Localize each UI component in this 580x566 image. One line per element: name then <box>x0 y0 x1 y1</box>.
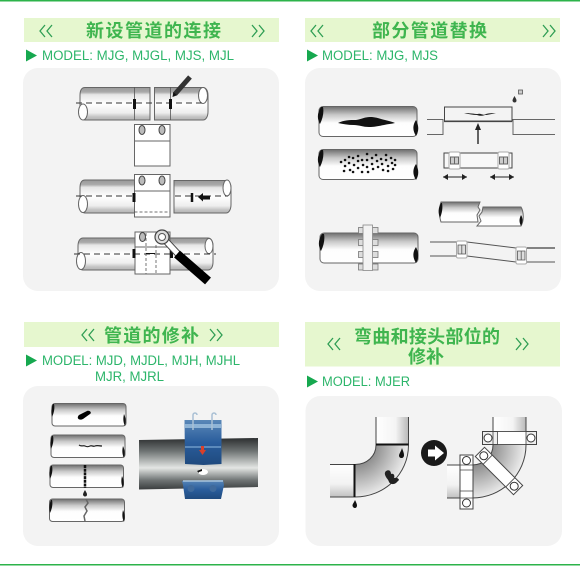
clamp: diagonal <box>475 447 523 495</box>
panel: elbow and joint repair <box>306 396 562 546</box>
diagram: broken pipe <box>439 202 523 226</box>
diagram: two-clamp sleeve with arrows <box>443 152 514 180</box>
diagram: circumferential leak <box>49 465 124 496</box>
bottom border line <box>0 564 580 566</box>
section heading: new pipe connection: 新设管道的连接 <box>86 20 221 41</box>
clamp: left <box>460 455 473 509</box>
diagram: elbow with clamps fitted <box>447 417 536 509</box>
diagram: clamp <box>134 124 170 166</box>
diagram: long crack pipe <box>318 106 418 136</box>
clamp: top <box>482 432 536 444</box>
diagram: flanged pipe <box>319 225 418 270</box>
top border line <box>0 0 580 2</box>
section heading: elbow and joint repair: 弯曲和接头部位的 <box>354 326 500 347</box>
model list: pipe repair: MODEL: MJD, MJDL, MJH, MJHL <box>42 353 240 368</box>
section heading: partial pipe replacement: 部分管道替换 <box>372 20 487 41</box>
diagram: insert pipe into clamp <box>76 174 231 217</box>
diagram: hole in pipe <box>51 404 126 426</box>
diagram: pitted pipe <box>318 150 418 180</box>
section heading: pipe repair <box>24 322 279 347</box>
model list: new pipe connection: MODEL: MJG, MJGL, MJS, MJL <box>42 48 234 63</box>
model list: elbow and joint repair: MODEL: MJER <box>322 374 410 389</box>
section heading: elbow and joint repair <box>305 322 560 367</box>
section heading: elbow and joint repair: 修补 <box>408 347 444 367</box>
diagram: leaking elbow <box>330 417 408 508</box>
panel: pipe repair <box>23 386 279 546</box>
section heading: partial pipe replacement <box>305 18 560 42</box>
panel: partial pipe replacement <box>305 68 561 291</box>
diagram: crack in pipe <box>50 435 125 458</box>
model list: pipe repair: MJR, MJRL <box>95 369 164 384</box>
panel: new pipe connection <box>23 68 279 291</box>
diagram: tighten bolts with wrench <box>74 230 216 281</box>
icon: arrow in circle <box>421 440 447 466</box>
diagram: clamp section over crack <box>427 90 555 144</box>
photo: clamp on grey pipe <box>139 413 258 499</box>
model list: pipe repair <box>26 353 240 384</box>
model list: partial pipe replacement: MODEL: MJG, MJS <box>322 48 438 63</box>
section heading: new pipe connection <box>24 18 279 42</box>
diagram: fractured pipe <box>49 499 125 522</box>
diagram: mark the pipe ends <box>76 77 208 120</box>
diagram: pipe alignment with couplings <box>430 241 555 264</box>
section heading: pipe repair: 管道的修补 <box>104 325 199 346</box>
